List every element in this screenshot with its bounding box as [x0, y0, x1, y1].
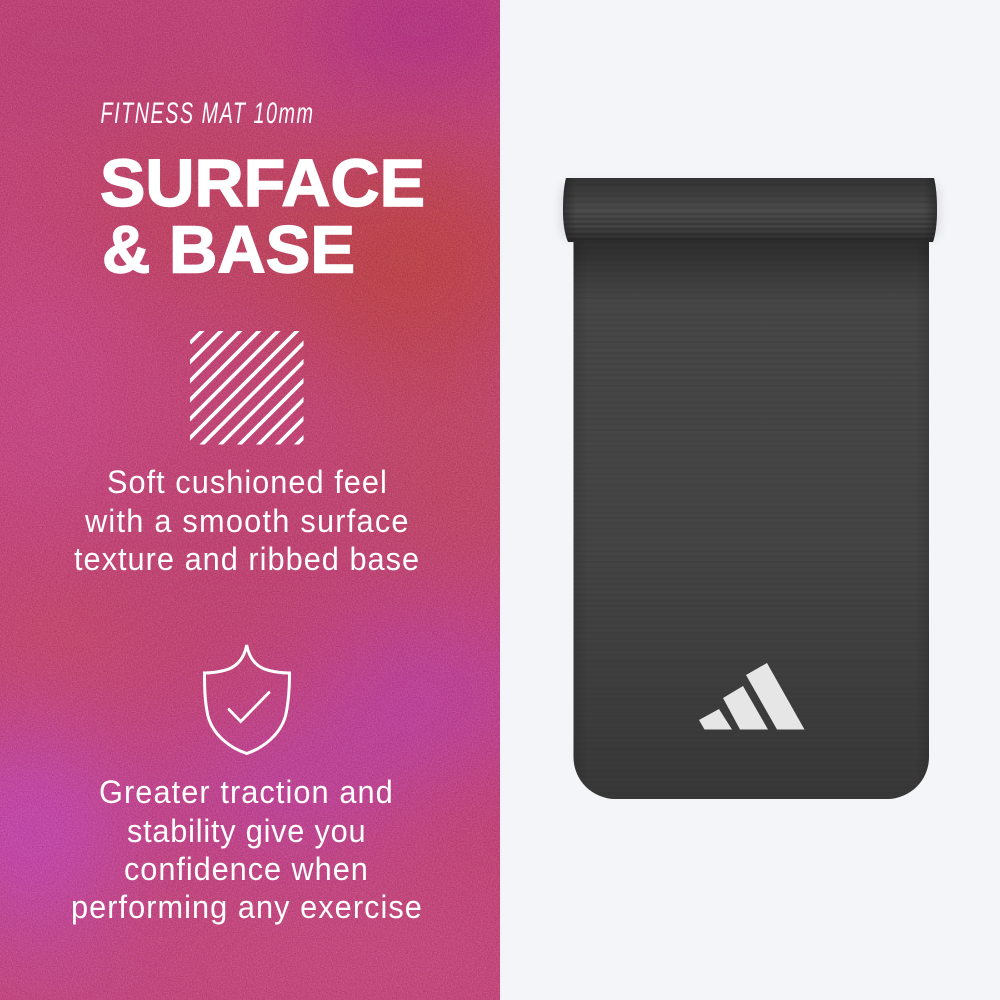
text: greater traction: confidence when — [124, 851, 368, 887]
panel: gradient text panel — [0, 0, 540, 1000]
mat body — [574, 235, 929, 799]
product: fitness mat — [560, 178, 940, 799]
heading: SURFACE — [100, 146, 425, 221]
text: soft cushioned feel: texture and ribbed base — [74, 541, 419, 577]
text: greater traction: stability give you — [127, 813, 366, 849]
text: soft cushioned feel: with a smooth surface — [84, 503, 409, 539]
text: soft cushioned feel — [74, 464, 419, 577]
mat shadow — [560, 182, 940, 240]
mat roll — [563, 178, 937, 242]
icon: shield with check — [204, 645, 290, 754]
text: greater traction: performing any exercise — [71, 889, 422, 925]
text: greater traction — [71, 774, 422, 925]
icon: diagonal stripes surface texture — [190, 331, 304, 444]
subtitle: FITNESS MAT 10mm — [100, 97, 313, 130]
text: soft cushioned feel: Soft cushioned feel — [107, 464, 387, 500]
text: greater traction: Greater traction and — [99, 774, 393, 810]
heading: & BASE — [102, 212, 355, 288]
heading — [100, 146, 425, 288]
icon: three bars logo — [699, 663, 804, 730]
